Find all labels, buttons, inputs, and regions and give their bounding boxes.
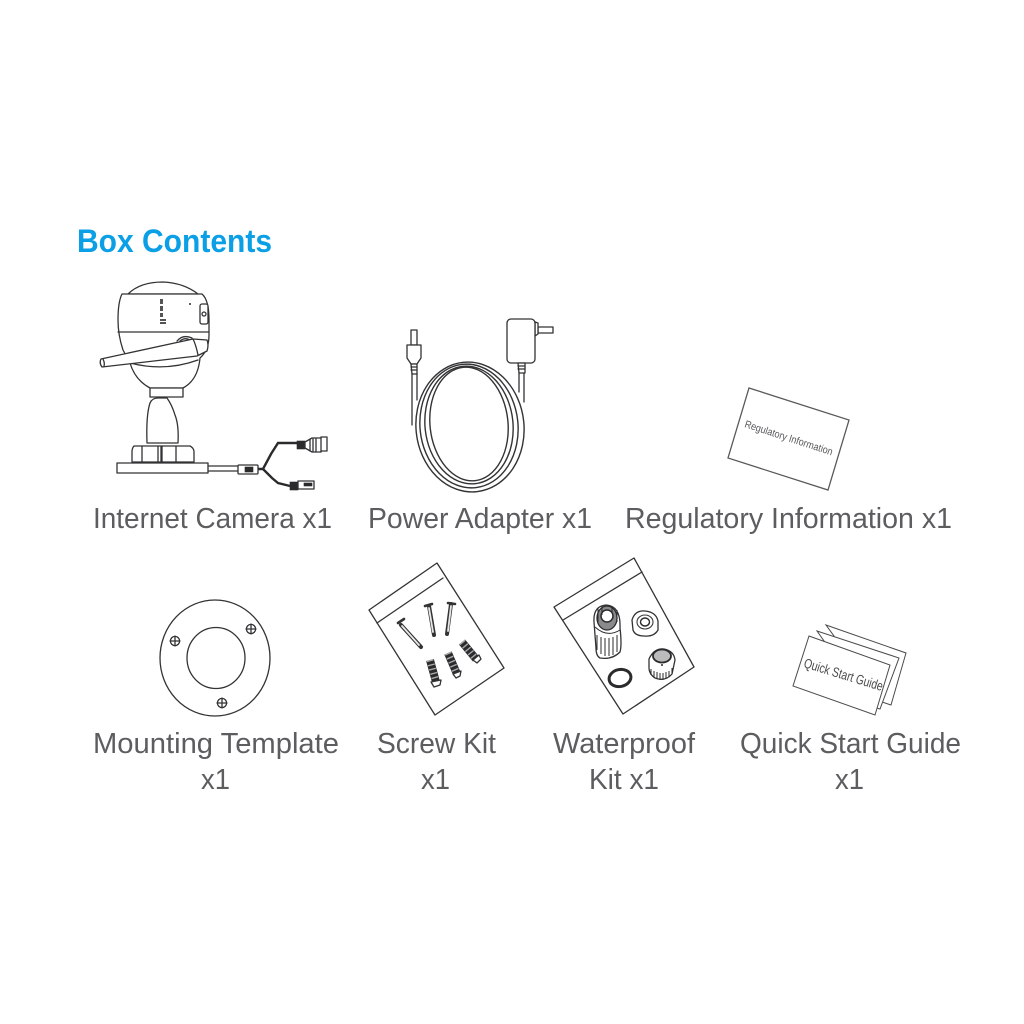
label: quick start guide: x1 bbox=[835, 764, 864, 796]
label: mounting template bbox=[93, 728, 339, 796]
label: quick start guide: Quick Start Guide bbox=[740, 728, 961, 760]
title: Box Contents bbox=[77, 223, 272, 259]
label: waterproof kit bbox=[553, 728, 696, 796]
label: regulatory information: Regulatory Information x1 bbox=[625, 503, 952, 535]
label: screw kit bbox=[377, 728, 496, 796]
label: mounting template: x1 bbox=[201, 764, 230, 796]
icon: regulatory information card bbox=[728, 388, 849, 490]
icon: internet camera bbox=[100, 282, 327, 490]
icon: screw kit bag bbox=[369, 563, 504, 715]
label: screw kit: Screw Kit bbox=[377, 728, 496, 760]
label: power adapter: Power Adapter x1 bbox=[368, 503, 592, 535]
wall anchors bbox=[430, 642, 476, 682]
label: waterproof kit: Kit x1 bbox=[589, 764, 659, 796]
screws bbox=[398, 603, 455, 647]
label: mounting template: Mounting Template bbox=[93, 728, 339, 760]
card text: Regulatory Information bbox=[743, 418, 834, 458]
label: quick start guide bbox=[740, 728, 961, 796]
icon: quick start guide booklets bbox=[793, 625, 906, 715]
guide text: Quick Start Guide bbox=[802, 656, 885, 694]
label: waterproof kit: Waterproof bbox=[553, 728, 696, 760]
icon: waterproof kit bag bbox=[554, 558, 694, 714]
label: screw kit: x1 bbox=[421, 764, 450, 796]
icon: power adapter bbox=[407, 319, 553, 497]
icon: mounting template bbox=[160, 600, 270, 716]
label: internet camera: Internet Camera x1 bbox=[93, 503, 332, 535]
